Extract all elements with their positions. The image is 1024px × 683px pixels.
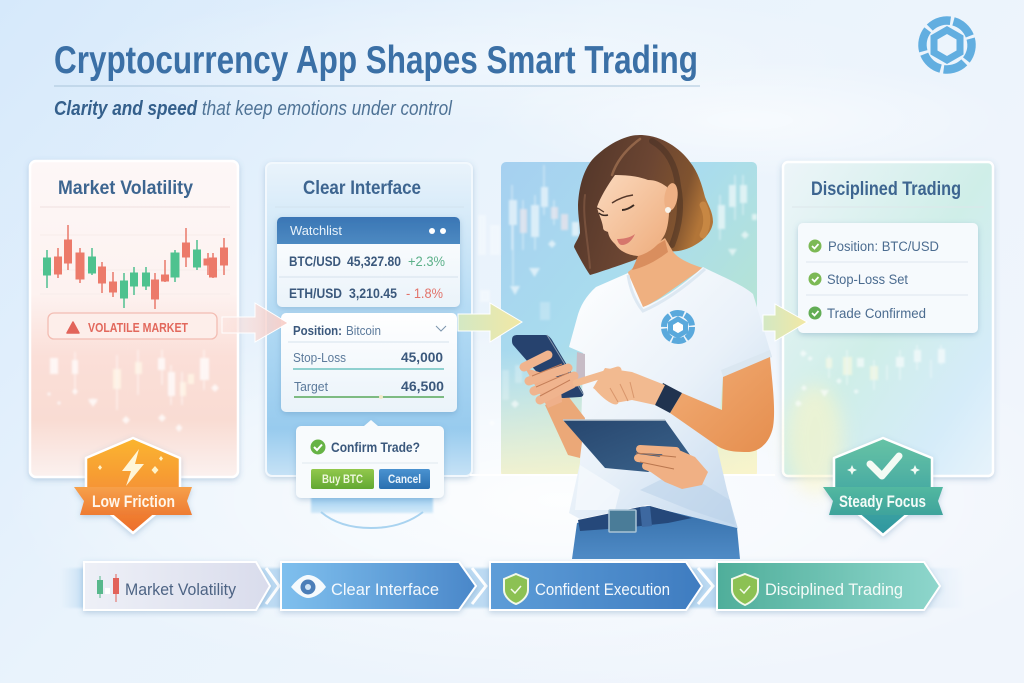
ear (663, 182, 679, 212)
watch (655, 383, 682, 413)
callout: volatile market (48, 313, 217, 339)
hair (574, 135, 713, 275)
button: cancel (379, 469, 430, 489)
step: disciplined trading (717, 562, 940, 610)
watchlist row: ETH: ETH/USD (289, 286, 342, 301)
button: cancel: Cancel (388, 472, 421, 486)
watchlist card: Watchlist (290, 224, 343, 238)
step: disciplined trading: Disciplined Trading (765, 580, 903, 599)
ribbon (74, 487, 192, 515)
icon: logo (917, 15, 977, 75)
position card: Stop-Loss (293, 351, 346, 365)
arm (670, 357, 774, 452)
icon: glow arc under confirm popup (311, 490, 433, 528)
yellow arrow (458, 303, 522, 342)
tablet (563, 420, 690, 472)
position card: Target (294, 380, 329, 394)
ribbon (823, 487, 943, 515)
step: confident execution (490, 562, 702, 610)
heading: market volatility: Market Volatility (58, 178, 193, 199)
icon: eye (291, 575, 326, 598)
right hand (636, 447, 708, 489)
person: woman using phone and tablet (512, 135, 774, 559)
step: market volatility (84, 562, 270, 610)
candlestick chart (44, 225, 228, 309)
checklist item: confirmed: Trade Confirmed (827, 306, 926, 321)
watchlist row: BTC: BTC/USD (289, 254, 341, 269)
position card: Position: (293, 324, 342, 338)
position card: 46,500 (401, 378, 444, 394)
position card: Bitcoin (346, 324, 381, 338)
shirt logo (664, 313, 692, 341)
badge: low friction: Low Friction (92, 492, 175, 511)
pink arrow (222, 303, 288, 342)
icon: shield (504, 574, 528, 604)
confirm popup (296, 420, 444, 498)
watchlist card (277, 217, 460, 307)
icon: check (310, 440, 326, 454)
neck (628, 238, 703, 308)
callout: volatile market: VOLATILE MARKET (88, 320, 188, 335)
watchlist card: 45,327.80 (347, 254, 401, 269)
arm shadow (576, 352, 585, 380)
faint candles (47, 350, 219, 432)
icon: lightning (122, 449, 144, 486)
checklist item: position: Position: BTC/USD (828, 239, 939, 254)
badge: steady focus: Steady Focus (839, 493, 926, 511)
belt (578, 506, 692, 532)
icon: check (870, 456, 899, 476)
pointing hand (576, 368, 665, 405)
position card (281, 313, 457, 412)
jeans (572, 506, 740, 559)
checklist item: stop-loss: Stop-Loss Set (827, 272, 908, 287)
icon: candles (97, 574, 119, 602)
confirm popup: Confirm Trade? (331, 439, 420, 455)
heading: disciplined trading: Disciplined Trading (811, 179, 961, 200)
icon: chevron (436, 326, 446, 331)
panel: disciplined trading (783, 162, 993, 495)
chevrons between steps (266, 568, 713, 604)
shirt (569, 267, 772, 529)
watchlist card: +2.3% (408, 254, 445, 269)
process band (60, 562, 965, 610)
button: buy: Buy BTC (322, 472, 363, 486)
icon: warning triangle (67, 322, 79, 333)
position card: 45,000 (401, 349, 443, 365)
panel: clear interface (266, 163, 472, 476)
watchlist header (277, 217, 460, 244)
yellow arrow 2 (763, 304, 807, 341)
left hand (524, 355, 574, 408)
panel: scene backdrop (470, 162, 775, 476)
checklist card (798, 223, 978, 333)
watchlist card: 3,210.45 (349, 286, 397, 301)
faint candles (795, 345, 945, 407)
icon: shield (732, 574, 758, 605)
step: market volatility: Market Volatility (125, 580, 236, 599)
subtitle: Clarity and speed that keep emotions under control (54, 98, 452, 120)
step: clear interface: Clear Interface (331, 580, 439, 599)
face (597, 175, 669, 256)
faint candles (489, 165, 757, 426)
step: clear interface (281, 562, 476, 610)
badge: low friction (74, 438, 192, 533)
facial features (597, 195, 635, 245)
panel: market volatility (30, 161, 238, 477)
title: Cryptocurrency App Shapes Smart Trading (54, 39, 698, 82)
hair streaks (584, 139, 707, 268)
badge: steady focus (823, 438, 943, 535)
far arm (545, 396, 585, 458)
watchlist card: - 1.8% (406, 286, 443, 301)
heading: clear interface: Clear Interface (303, 178, 421, 199)
phone (512, 335, 583, 398)
step: confident execution: Confident Execution (535, 580, 670, 599)
button: buy (311, 469, 374, 489)
